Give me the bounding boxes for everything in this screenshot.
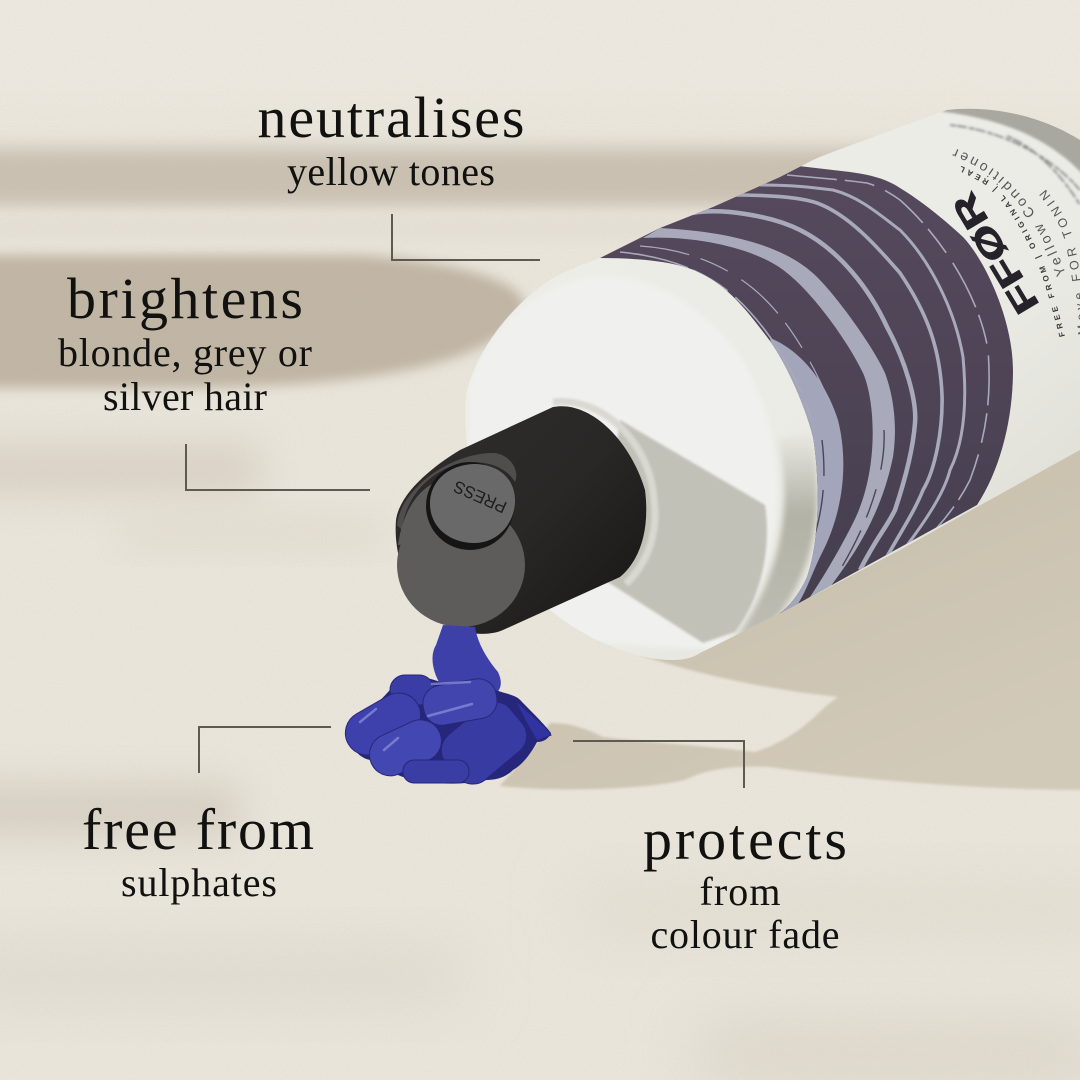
pump cap (396, 401, 655, 634)
subtext line two: silver hair (103, 374, 267, 419)
conditioner stream (433, 625, 501, 698)
highlights (360, 682, 472, 750)
callout: brightens (58, 266, 370, 490)
subtext line two: colour fade (650, 912, 840, 957)
callout: neutralises (258, 85, 540, 260)
cap rim (397, 453, 516, 530)
conditioner lumps (337, 675, 551, 792)
fine brush lines (620, 251, 772, 339)
subtext: blonde, grey or (58, 330, 312, 375)
bottle shoulder shading (470, 104, 1080, 650)
subtext: yellow tones (287, 149, 495, 194)
subtext: sulphates (121, 860, 277, 905)
cap cylinder (396, 406, 646, 634)
heading: brightens (67, 266, 303, 331)
purple brush band (600, 166, 1013, 614)
leader line (392, 214, 540, 260)
bottle label text (945, 122, 1080, 337)
product name line one: Yellow Conditioner (952, 149, 1064, 278)
brand tagline: FREE FROM | ORIGINAL | REAL (961, 166, 1065, 337)
bottle body (465, 109, 1080, 660)
leader line (186, 444, 370, 490)
leader line (199, 727, 331, 773)
heading: neutralises (258, 85, 524, 150)
cap collar highlight (553, 401, 655, 584)
press button (426, 462, 515, 550)
callout: protects (573, 741, 847, 957)
brand logo: FFØR (945, 186, 1046, 321)
press label: PRESS (451, 477, 510, 517)
second wide light stripe (643, 228, 895, 600)
bottle (466, 108, 1080, 660)
heading: free from (82, 797, 314, 862)
callout: free from (82, 727, 331, 905)
subtext: from (700, 869, 780, 914)
wide light stripe next to shoulder (770, 338, 844, 613)
bottle and product cast shadow on surface (500, 440, 1080, 790)
leader line (573, 741, 744, 788)
cap face disc (397, 484, 525, 627)
heading: protects (643, 807, 847, 872)
fine print strokes (950, 125, 1080, 205)
far end grey rim (942, 108, 1080, 173)
conditioner pile (352, 677, 551, 784)
blue conditioner (337, 625, 551, 792)
